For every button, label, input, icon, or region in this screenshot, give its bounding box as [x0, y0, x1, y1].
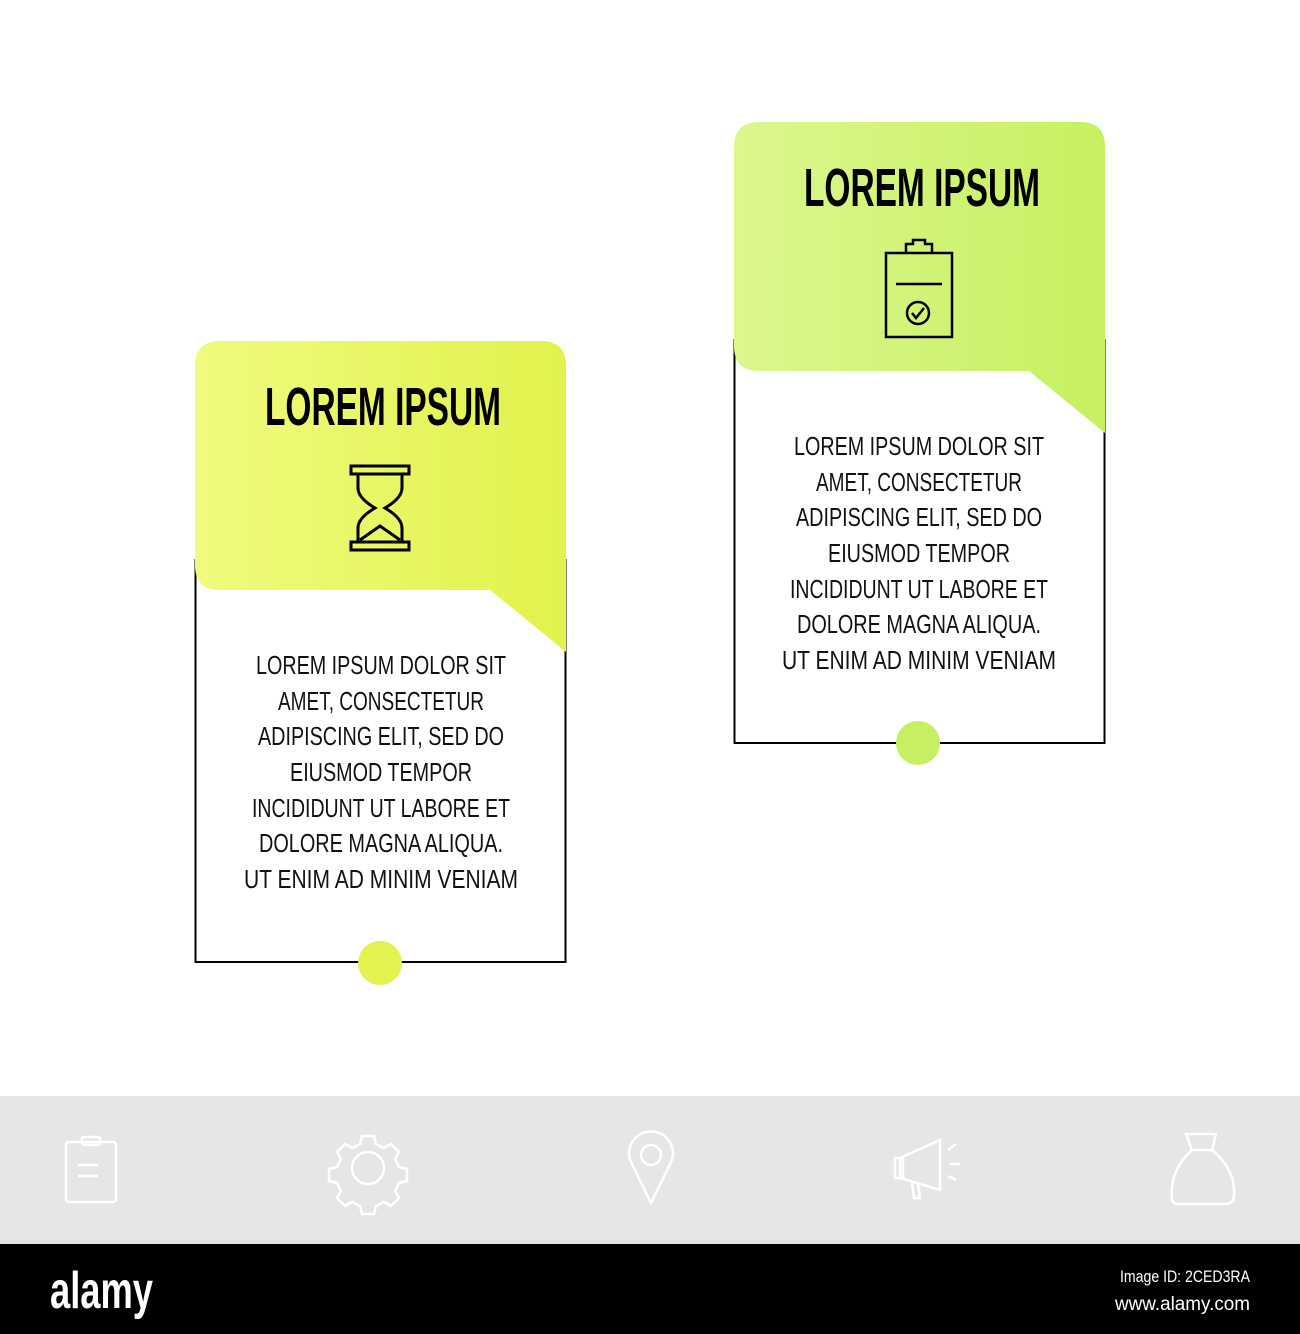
- icon: gear: [329, 1136, 407, 1214]
- footer id text: Image ID: 2CED3RA: [1120, 1267, 1251, 1286]
- right card body text: DOLORE MAGNA ALIQUA.: [797, 609, 1041, 639]
- icon: location pin: [629, 1131, 673, 1203]
- right card dot: [896, 721, 940, 765]
- footer bar: www.alamy.com: [1114, 1294, 1250, 1315]
- right card body text: LOREM IPSUM DOLOR SIT: [794, 431, 1044, 461]
- footer bar: [0, 1244, 1300, 1334]
- left card body text: INCIDIDUNT UT LABORE ET: [252, 793, 510, 823]
- footer logo: alamy: [50, 1262, 153, 1320]
- right card body text: [782, 431, 1056, 675]
- right card body text: INCIDIDUNT UT LABORE ET: [790, 574, 1048, 604]
- left card body text: EIUSMOD TEMPOR: [290, 757, 472, 787]
- right card body text: EIUSMOD TEMPOR: [828, 538, 1010, 568]
- right card header: [734, 122, 1105, 433]
- icon: megaphone: [895, 1140, 960, 1198]
- right card body text: UT ENIM AD MINIM VENIAM: [782, 645, 1056, 675]
- left card body text: AMET, CONSECTETUR: [278, 686, 484, 716]
- icon strip: [0, 1096, 1300, 1244]
- left card body text: DOLORE MAGNA ALIQUA.: [259, 828, 503, 858]
- panel: left card: [195, 341, 566, 985]
- left card body text: [244, 650, 518, 894]
- right card title: LOREM IPSUM: [804, 158, 1040, 218]
- left card body text: LOREM IPSUM DOLOR SIT: [256, 650, 506, 680]
- left card body text: ADIPISCING ELIT, SED DO: [258, 721, 504, 751]
- left card dot: [358, 941, 402, 985]
- icon: sack: [1172, 1134, 1234, 1204]
- icon: clipboard: [66, 1137, 116, 1202]
- right card body text: AMET, CONSECTETUR: [816, 467, 1022, 497]
- panel: right card: [734, 122, 1105, 765]
- icon: hourglass: [351, 466, 409, 550]
- icon: clipboard check: [886, 240, 952, 337]
- left card header: [195, 341, 566, 652]
- left card body text: UT ENIM AD MINIM VENIAM: [244, 864, 518, 894]
- right card body text: ADIPISCING ELIT, SED DO: [796, 502, 1042, 532]
- left card title: LOREM IPSUM: [265, 377, 501, 437]
